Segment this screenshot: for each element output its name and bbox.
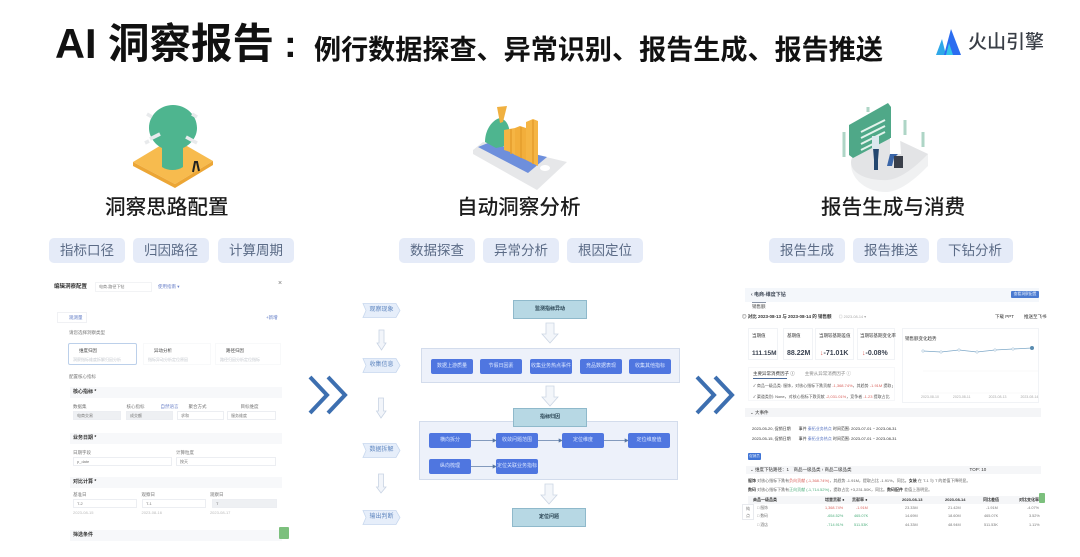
block <box>496 433 538 448</box>
value: 111.15M <box>752 350 777 357</box>
kpi card <box>748 328 778 360</box>
drill header <box>746 466 1041 474</box>
table row: 1.11% <box>1029 523 1039 527</box>
insight line: 服饰 对核心指标下跌有负向贡献 (-1,368.74%)，其趋势 -1.91M，提取占比 -1.91%，同比。女装 在 T-1 与 T 的差值下降明显。 <box>748 478 970 483</box>
table row: -654.52% <box>827 514 843 518</box>
field: T-1 <box>146 501 152 506</box>
event row: 2023-05-15, 促销日期 事件 秦拓业务热点 时间范围: 2023-07-01 ~ 2023-08-31 <box>752 436 897 441</box>
table row: 48.94M <box>948 523 961 527</box>
middle box <box>513 408 587 427</box>
top box: 监测指标异动 <box>535 306 565 312</box>
table header: 2023-08-13 <box>902 497 922 502</box>
logo text: 火山引擎 <box>968 32 1044 53</box>
blue button: 查看洞察配置 <box>1014 292 1036 296</box>
block <box>629 359 671 374</box>
form name field: 电商-路径下钻 <box>99 284 124 289</box>
pill <box>399 238 475 263</box>
table row: 1,368.74% <box>825 506 843 510</box>
title colon: : <box>284 24 297 66</box>
insight line: 数码 对核心指标下跌有正向贡献 (-1,714.52%)，提取占比 +3,231.50K，同比。数码配件 差值上涨明显。 <box>748 487 932 492</box>
toolbar links: 下载 PPT 推送至飞书 <box>995 314 1047 319</box>
field: p_date <box>77 459 89 464</box>
table header: 同比差值 <box>983 497 999 502</box>
pill <box>133 238 209 263</box>
field: 电商交易 <box>77 413 93 418</box>
pill: 归因路径 <box>144 243 198 258</box>
table row <box>757 506 1039 510</box>
block: 竞品数据表现 <box>586 363 616 369</box>
option text: 维度归因 <box>79 348 97 353</box>
container: decomposition <box>419 421 678 480</box>
table header: 商品一级品类 <box>753 497 777 502</box>
tag: 输出判断 <box>369 514 394 520</box>
field: 服务维度 <box>231 413 247 418</box>
section: business date: 业务日期 * <box>73 435 96 441</box>
flow: step tags <box>362 303 400 525</box>
add link: +新增 <box>266 315 278 320</box>
block <box>480 359 522 374</box>
tag: 收集信息 <box>369 362 394 368</box>
option card selected <box>68 343 137 365</box>
pill: 异常分析 <box>494 243 548 258</box>
table row: -714.91% <box>827 523 843 527</box>
reason line: ✓ 渠道类别: None，对核心指标下跌贡献 -2,031.01%，竞争者 -1.23 提取占比 <box>753 394 890 399</box>
close icon: × <box>278 280 282 287</box>
field <box>177 411 224 420</box>
pill <box>853 238 929 263</box>
date notes: 2023-08-15 2023-08-16 2023-08-17 <box>73 510 230 515</box>
option card <box>215 343 281 365</box>
labels row: 基准日 观察日 观察日 <box>73 492 224 497</box>
table row: -4.07% <box>1027 506 1039 510</box>
block <box>580 359 622 374</box>
label: 当期较基期变化率 <box>860 333 896 338</box>
table row <box>757 522 1040 527</box>
table row: 465.07K <box>854 514 868 518</box>
table row: 23.33M <box>905 506 918 510</box>
side mini toolbar: 点 <box>746 513 750 518</box>
table header <box>748 496 1039 504</box>
pill <box>567 238 643 263</box>
step 2: 配置核心指标 <box>69 374 96 379</box>
field <box>126 411 173 420</box>
green tab <box>1039 493 1045 503</box>
block: 定位关联业务指标 <box>497 463 537 469</box>
section: core metric: 核心指标 * <box>73 389 96 395</box>
icon: phone with bars <box>473 106 567 190</box>
form name field <box>95 282 152 292</box>
pill <box>218 238 294 263</box>
labels row: 日期字段 计算粒度 <box>73 450 194 455</box>
label: 当期较基期差值 <box>819 333 850 338</box>
section: core metric <box>70 387 282 398</box>
event rows: 2023-05-20, 促销日期 事件 秦拓业务热点 时间范围: 2023-07-01 ~ 2023-08-31 <box>752 426 897 431</box>
heading: report generation: 报告生成与消费 <box>821 196 965 219</box>
axis labels: 2023-08-10 2023-08-11 2023-08-13 2023-08-14 <box>921 395 1038 399</box>
table row: 511.53K <box>984 523 998 527</box>
block <box>530 359 572 374</box>
tab: 销售额 <box>752 304 766 309</box>
icon: report board with people <box>842 103 928 192</box>
table row: 465.07K <box>984 514 998 518</box>
bottom box <box>512 508 586 527</box>
heading: insight config: 洞察思路配置 <box>105 196 229 219</box>
chevron arrow right <box>696 376 735 414</box>
flow arrows <box>471 322 628 504</box>
block: 定位维度值 <box>636 437 662 443</box>
table row <box>757 513 1040 518</box>
block: 定位维度 <box>573 437 593 443</box>
pill <box>483 238 559 263</box>
field <box>73 499 137 508</box>
icon: lightbulb on platform <box>133 105 213 188</box>
value: ↓-0.08% <box>862 350 888 357</box>
blue badge: 促销员 <box>749 454 760 458</box>
top box <box>513 300 587 319</box>
table row: 21.42M <box>948 506 961 510</box>
table row: 14.69M <box>905 514 918 518</box>
report header <box>745 288 1039 302</box>
label: 当期值 <box>752 333 766 338</box>
option note: 路径归因分析定位指标 <box>220 357 260 362</box>
tag: 数据拆解 <box>369 447 394 453</box>
option text: 异动分析 <box>154 348 172 353</box>
block: 收集业务热点事件 <box>531 363 571 369</box>
logo: volcano engine <box>936 29 1044 55</box>
chevron arrow left <box>308 376 348 414</box>
value: ↓-71.01K <box>820 350 848 357</box>
line chart <box>922 346 1034 354</box>
table header: 贡献率 ● <box>852 497 868 502</box>
drill header: ⌄ 维度下钻路径：1 商品一级品类 › 商品二级品类 TOP: 10 <box>750 467 986 472</box>
pill: 下钻分析 <box>948 243 1002 258</box>
heading: auto analysis: 自动洞察分析 <box>457 196 581 219</box>
kpi card <box>815 328 854 360</box>
field: 求和 <box>181 413 189 418</box>
table row: □ 服饰 <box>757 506 768 510</box>
pill: 指标口径 <box>60 243 114 258</box>
form link: 使用指南 ▾ <box>158 284 180 289</box>
option note: 洞察指标维度拆解归因分析 <box>73 357 121 362</box>
block <box>562 433 604 448</box>
pill: 报告生成 <box>780 243 834 258</box>
date title: ◎ 对比 2023-08-13 与 2023-08-14 的 销售额 ◎ 2023-08-14 ▾ <box>742 314 866 319</box>
option card <box>143 343 211 365</box>
blocks row 1: 数据上游质量 <box>437 363 467 369</box>
flow: main diagram <box>419 300 680 527</box>
field <box>73 411 121 420</box>
field: 按天 <box>180 459 188 464</box>
field: T-2 <box>77 501 83 506</box>
blocks row 1 <box>431 359 473 374</box>
section: business date <box>70 433 282 444</box>
table header: 对比变化率 <box>1019 497 1039 502</box>
section: comparison: 对比计算 * <box>73 479 96 485</box>
line chart panel <box>902 328 1039 403</box>
section: comparison <box>70 477 282 488</box>
pill: 报告推送 <box>864 243 918 258</box>
divider tab <box>57 312 87 323</box>
table row: 3.52% <box>1029 514 1040 518</box>
label: 基期值 <box>787 333 800 338</box>
logo mark <box>936 29 961 55</box>
option text: 路径归因 <box>226 348 244 353</box>
form title: 编辑洞察配置 <box>54 284 87 290</box>
blue badge <box>748 453 761 460</box>
field <box>212 499 277 508</box>
field <box>227 411 276 420</box>
side mini toolbar <box>742 504 754 520</box>
tab <box>752 302 766 310</box>
field: T <box>216 501 218 506</box>
block: 节假日因素 <box>488 363 514 369</box>
field: 成交额 <box>130 413 142 418</box>
green badge <box>279 527 289 539</box>
kpi card <box>783 328 813 360</box>
table header: 增量贡献 ● <box>825 497 845 502</box>
step tag shapes and connecting arrows <box>362 303 400 525</box>
side mini toolbar: 纯 <box>746 506 750 511</box>
blocks row 2: 横向拆分 <box>440 437 460 443</box>
table row: 18.60M <box>948 514 961 518</box>
pill <box>937 238 1013 263</box>
field <box>176 457 276 466</box>
reason panel <box>748 367 895 401</box>
block <box>628 433 670 448</box>
container: collect <box>421 348 680 383</box>
block: 收敛问题范围 <box>502 437 532 443</box>
value: 88.22M <box>787 350 810 357</box>
table header: 2023-08-14 <box>945 497 965 502</box>
block <box>496 459 538 474</box>
field <box>142 499 206 508</box>
blue button <box>1011 291 1039 298</box>
tag: 观察现象 <box>369 307 394 313</box>
report header: ‹ 电商-维度下钻 <box>751 292 786 298</box>
divider tab: 观测量 <box>69 315 82 320</box>
table row: □ 酒店 <box>757 523 768 527</box>
events header: ⌄ 大事件 <box>750 410 769 415</box>
events header <box>745 408 1041 417</box>
pill <box>49 238 125 263</box>
pill: 数据探查 <box>410 243 464 258</box>
table row: 511.53K <box>854 523 868 527</box>
block: 收集其他指标 <box>635 363 665 369</box>
table row: 44.33M <box>905 523 918 527</box>
blocks row 2 <box>429 433 471 448</box>
title: AI 洞察报告 <box>55 20 274 67</box>
option note: 指标异动分析定位原因 <box>148 357 188 362</box>
tab underline <box>753 378 787 379</box>
section: filter: 筛选条件 <box>73 532 93 538</box>
pill: 根因定位 <box>578 243 632 258</box>
panel: config form screenshot <box>54 280 289 539</box>
step 1: 请您选择洞察类型 <box>69 330 105 335</box>
pill: 计算周期 <box>229 243 283 258</box>
labels row: 数据集 核心指标 自然语言 聚合方式 目标维度 <box>73 404 258 409</box>
field <box>73 457 172 466</box>
kpi card <box>857 328 895 360</box>
block: 纵向梳理 <box>440 463 460 469</box>
tabs: 主要异常消费因子 ⓘ 主要从异常消费因子 ⓘ <box>753 371 851 376</box>
table row: -1.91M <box>856 506 868 510</box>
panel: report screenshot <box>742 288 1047 527</box>
subtitle: 例行数据探查、异常识别、报告生成、报告推送 <box>314 34 883 65</box>
table row: -1.91M <box>986 506 998 510</box>
middle box: 指标归因 <box>540 414 560 420</box>
section: filter <box>70 530 282 541</box>
bottom box: 定位问题 <box>539 514 559 520</box>
pill <box>769 238 845 263</box>
block <box>429 459 471 474</box>
table row: □ 数码 <box>757 514 768 518</box>
data table <box>748 496 1040 527</box>
chart title: 销售额变化趋势 <box>905 336 936 341</box>
